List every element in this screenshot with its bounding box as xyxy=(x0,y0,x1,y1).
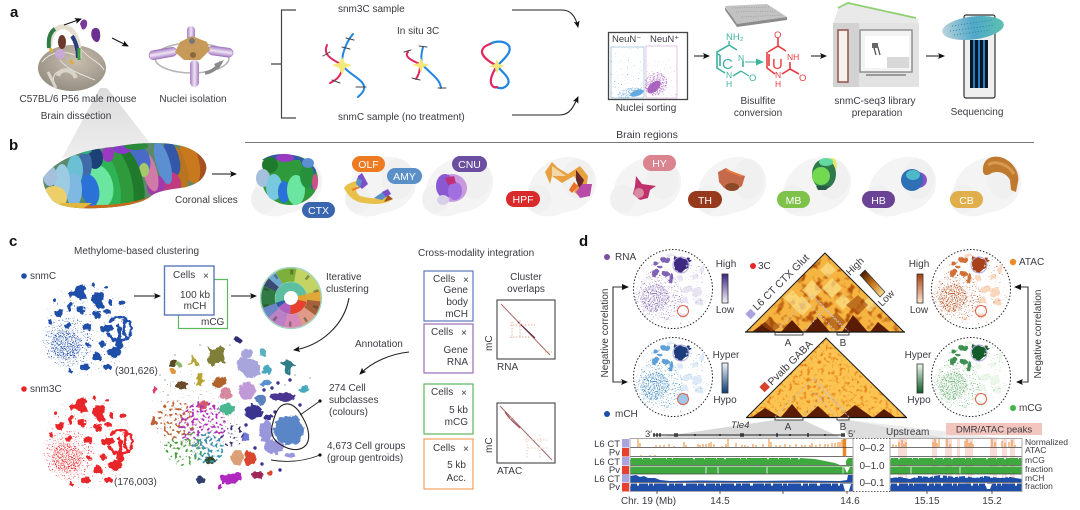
track labels: right side: fraction xyxy=(1025,481,1053,491)
map: mCH xyxy=(634,338,712,416)
chart: iterative clustering donut xyxy=(260,268,322,328)
tracks: right mCH xyxy=(890,475,1022,491)
map: RNA xyxy=(634,250,712,328)
track labels: cell types: Pv xyxy=(609,482,620,493)
arrow: snm3C sample to sorting xyxy=(512,10,578,27)
region bracket: lower A xyxy=(775,418,803,433)
label: library preparation: snmC-seq3 library xyxy=(834,96,916,107)
callout: 274 cell subclasses: subclasses xyxy=(329,395,378,406)
icon: cytosine molecule: N xyxy=(738,53,744,63)
icon: cytosine molecule: O xyxy=(749,73,756,84)
matrix boxes: 100 kb mCH and mCG: Cells xyxy=(173,270,195,281)
diagram: chromatin fragment 2 xyxy=(404,46,446,88)
matrix box: gene body mCH: Cells xyxy=(433,274,455,285)
panel label a: a xyxy=(10,4,19,21)
tracks: left mCH xyxy=(630,475,853,491)
panel a: experimental workflow xyxy=(10,3,1005,123)
icon: uracil molecule: O xyxy=(774,30,781,41)
scatter: cell subclass map xyxy=(149,337,310,490)
label: iterative clustering: clustering xyxy=(326,284,369,295)
label: DMR/ATAC peaks xyxy=(946,423,1042,436)
label: in situ 3C: In situ 3C xyxy=(397,26,439,37)
label: bisulfite conversion xyxy=(734,96,782,119)
arrow: matrix to clustering xyxy=(231,295,256,297)
label: cluster overlaps xyxy=(507,272,545,295)
label pill: CTX: CTX xyxy=(308,205,329,217)
count: snmC: (301,626) xyxy=(115,366,158,377)
track labels: right side xyxy=(1025,437,1068,491)
label: iterative clustering xyxy=(326,272,369,295)
label: nuclei sorting: Nuclei sorting xyxy=(616,103,676,114)
panel label b: b xyxy=(9,137,18,154)
label: nuclei isolation: Nuclei isolation xyxy=(159,94,227,105)
label: mouse strain: C57BL/6 P56 male mouse xyxy=(20,94,137,105)
legend: 3C xyxy=(750,261,771,272)
matrix box: 5 kb mCG: 5 kb xyxy=(449,405,468,416)
label: upstream: Upstream xyxy=(886,427,929,438)
chart: nuclei sorting gate plot xyxy=(608,32,688,101)
colour bar: RNA High to Low: High xyxy=(716,259,736,270)
icon: cytosine molecule: H xyxy=(726,79,732,89)
region: CB xyxy=(983,157,1018,192)
scale gap labels: 0–0.1 xyxy=(859,478,885,489)
label: cluster overlaps: Cluster xyxy=(510,272,543,283)
label: cluster overlaps: overlaps xyxy=(507,284,545,295)
track labels: cell types: L6 CT xyxy=(594,457,620,468)
matrix boxes: 100 kb mCH and mCG: × xyxy=(203,271,209,282)
region: CNU xyxy=(436,174,467,205)
bracket: left negative correlation xyxy=(613,287,627,382)
icon: uracil molecule xyxy=(767,30,806,89)
panel d: multi-modal epigenomic comparison xyxy=(579,233,1068,507)
matrix box: 5 kb mCG xyxy=(424,384,473,434)
matrix box: 5 kb accessibility: Cells xyxy=(433,443,455,454)
colour bar: 3C High to Low xyxy=(844,256,898,309)
matrix box: gene body mCH: × xyxy=(463,275,469,286)
label pill: TH xyxy=(688,191,722,208)
label: annotation: Annotation xyxy=(355,339,403,350)
icon: uracil molecule: H xyxy=(775,79,781,89)
matrix box: gene RNA: Cells xyxy=(431,327,453,338)
label: left negative correlation: Negative correlation xyxy=(600,289,611,377)
callout: 274 cell subclasses: 274 Cell xyxy=(329,383,366,394)
region bracket: lower B: B xyxy=(840,422,847,433)
label: sequencing: Sequencing xyxy=(951,107,1003,118)
colour bar: mCG Hyper to Hypo: Hyper xyxy=(905,350,932,361)
matrix box: 5 kb accessibility xyxy=(424,439,473,489)
matrix box: gene body mCH: mCH xyxy=(445,309,468,320)
region: OLF and AMY xyxy=(344,173,393,204)
matrix boxes: 100 kb mCH and mCG: 100 kb xyxy=(180,290,210,301)
colour bar: RNA High to Low xyxy=(716,259,736,316)
label pill: CNU: CNU xyxy=(458,159,481,171)
matrix box: gene body mCH: Gene xyxy=(444,285,468,296)
tracks: right mCG xyxy=(890,458,1022,474)
gene model: Tle4: 5′ xyxy=(848,429,855,440)
matrix boxes: 100 kb mCH and mCG: mCG xyxy=(201,317,225,328)
track labels: cell types: L6 CT xyxy=(594,474,620,485)
heatmap border: upper xyxy=(746,253,904,332)
scale gap labels xyxy=(853,438,890,492)
track labels: right side: mCH xyxy=(1025,473,1044,483)
region bracket: lower B xyxy=(837,418,849,433)
genomic axis: 14.6 xyxy=(840,496,860,507)
callout: 274 cell subclasses xyxy=(300,383,378,418)
colour bar: mCH Hyper to Hypo: Hypo xyxy=(713,395,737,406)
arrow: bisulfite to library xyxy=(811,55,826,57)
colour bar: 3C High to Low: High xyxy=(844,256,867,278)
label pill: HPF xyxy=(506,191,540,207)
ghost brain outlines xyxy=(251,157,1021,216)
chart: mC vs RNA overlap: mC xyxy=(484,335,495,351)
gene model: Tle4 xyxy=(645,429,855,440)
label pill: HY: HY xyxy=(652,158,667,170)
matrix box: 5 kb mCG: × xyxy=(461,388,467,399)
arrow: sorting to bisulfite xyxy=(694,55,709,57)
heatmap: Pvalb GABA contact map xyxy=(746,338,907,418)
chart: nuclei sorting gate plot: NeuN⁺ xyxy=(650,34,679,45)
icon: uracil molecule: NH xyxy=(787,52,799,62)
genomic axis: 15.2 xyxy=(982,496,1002,507)
region: HY xyxy=(633,176,656,200)
arrow: clustering to map xyxy=(294,298,349,350)
callout: 4,673 cell groups: 4,673 Cell groups xyxy=(327,441,405,452)
label pill: CB: CB xyxy=(959,195,974,207)
label pill: CTX xyxy=(302,202,335,218)
legend: RNA: RNA xyxy=(615,252,636,263)
label pill: OLF: OLF xyxy=(358,159,379,171)
matrix box: 5 kb accessibility: 5 kb xyxy=(447,460,466,471)
matrix box: 5 kb accessibility: × xyxy=(463,444,469,455)
heatmap border: lower xyxy=(747,338,906,417)
label: brain dissection: Brain dissection xyxy=(41,111,111,122)
heading: cross-modality integration: Cross-modality integration xyxy=(418,248,534,259)
icon: multiwell plate xyxy=(725,4,787,27)
label pill: HY xyxy=(643,155,676,171)
track labels: right side: ATAC xyxy=(1025,445,1046,455)
colour bar: ATAC High to Low xyxy=(909,259,929,316)
chart: mC vs ATAC overlap: ATAC xyxy=(497,466,522,477)
label pill: TH: TH xyxy=(698,195,712,207)
legend: mCH xyxy=(604,409,638,420)
arrow: annotation to subclasses xyxy=(360,352,409,374)
icon: cytosine molecule xyxy=(717,32,763,89)
label: bisulfite conversion: conversion xyxy=(734,108,782,119)
region bracket: upper A: A xyxy=(785,338,792,349)
label pill: MB xyxy=(777,191,810,208)
region bracket: upper A xyxy=(775,332,803,349)
genomic axis: 15.15 xyxy=(914,496,940,507)
diagram: chromatin fragment 1 xyxy=(323,34,366,97)
matrix box: 5 kb mCG: mCG xyxy=(445,417,468,428)
count: snm3C: (176,003) xyxy=(114,477,157,488)
label: snm3C sample: snm3C sample xyxy=(338,4,405,15)
arrow: snmC sample to sorting xyxy=(512,97,578,115)
colour bar: mCG Hyper to Hypo xyxy=(905,350,932,406)
legend: snmC: snmC xyxy=(30,271,56,282)
map: mCG xyxy=(932,338,1010,416)
scatter: snmC t-SNE xyxy=(41,283,133,376)
icon: centrifuge xyxy=(148,26,234,87)
track labels: right side: mCG xyxy=(1025,455,1045,465)
label: coronal slices: Coronal slices xyxy=(175,195,238,206)
track labels: cell types: L6 CT xyxy=(594,439,620,450)
region: HB xyxy=(901,169,927,191)
matrix boxes: 100 kb mCH and mCG xyxy=(164,266,228,328)
arrow: library to sequencing xyxy=(926,55,944,57)
arrow: slices to regions xyxy=(212,173,236,175)
label pill: AMY xyxy=(387,168,422,184)
projection wedges from heatmap to tracks xyxy=(652,420,1000,438)
label pill: HB: HB xyxy=(871,195,886,207)
icon: cytosine molecule: N xyxy=(726,70,732,80)
region: MB xyxy=(812,158,837,190)
chart: mC vs ATAC overlap xyxy=(484,403,555,477)
icon: uracil molecule: N xyxy=(775,70,781,80)
divider line xyxy=(245,142,1034,144)
label: iterative clustering: Iterative xyxy=(326,272,362,283)
label: DMR/ATAC peaks: DMR/ATAC peaks xyxy=(956,424,1032,436)
matrix box: 5 kb mCG: Cells xyxy=(431,387,453,398)
icon: uracil molecule: O xyxy=(799,73,806,84)
matrix box: gene RNA: Gene xyxy=(444,345,468,356)
matrix box: gene body mCH xyxy=(424,271,473,321)
track labels: cell types xyxy=(594,439,629,493)
coronal slice stack xyxy=(43,143,206,208)
arrow: t-SNE to matrix xyxy=(134,295,160,297)
region: HPF xyxy=(545,162,592,198)
matrix box: gene body mCH: body xyxy=(446,297,468,308)
label pill: CNU xyxy=(452,156,487,172)
label: bisulfite conversion: Bisulfite xyxy=(740,96,776,107)
heading: brain regions: Brain regions xyxy=(616,129,678,141)
genomic axis: 14.5 xyxy=(710,496,730,507)
colour bar: mCH Hyper to Hypo xyxy=(713,350,740,406)
icon: mouse brain dissection xyxy=(38,19,106,91)
label: library preparation: preparation xyxy=(852,108,902,119)
callout: 274 cell subclasses: (colours) xyxy=(329,407,368,418)
colour bar: ATAC High to Low: High xyxy=(909,259,929,270)
tracks: left mCG xyxy=(630,458,853,474)
legend: ATAC: ATAC xyxy=(1019,257,1044,268)
legend: snm3C: snm3C xyxy=(30,384,62,395)
gene model: Tle4: 3′ xyxy=(645,429,652,440)
arrowhead: right upper xyxy=(1014,284,1021,290)
chart: mC vs RNA overlap xyxy=(484,300,555,373)
label pill: HPF: HPF xyxy=(512,194,534,206)
icon: cytosine molecule: C xyxy=(722,56,733,73)
genomic axis: Chr. 19 (Mb) xyxy=(621,496,676,507)
colour bar: RNA High to Low: Low xyxy=(716,305,735,316)
chart: nuclei sorting gate plot: NeuN⁻ xyxy=(612,34,641,45)
bracket: right negative correlation xyxy=(1017,287,1028,382)
region: TH xyxy=(718,168,745,191)
region bracket: upper B: B xyxy=(840,338,847,349)
genomic axis xyxy=(621,491,1002,507)
tracks: pink DMR strips xyxy=(898,439,1015,491)
track labels: right side: fraction xyxy=(1025,464,1053,474)
panel label d: d xyxy=(579,233,588,250)
colour bar: 3C High to Low: Low xyxy=(876,288,898,309)
track frame lines xyxy=(630,448,1022,482)
label pill: MB: MB xyxy=(786,195,801,207)
label: L6 CT CTX Glut: L6 CT CTX Glut xyxy=(751,252,812,313)
legend: mCG: mCG xyxy=(1019,403,1043,414)
icon: uracil molecule: U xyxy=(772,56,783,73)
diagram: chromatin loop xyxy=(482,42,510,88)
region: CTX xyxy=(256,154,318,205)
label pill: HB xyxy=(862,191,895,208)
arrowhead: left upper xyxy=(622,284,629,290)
label: snmC sample: snmC sample (no treatment) xyxy=(338,112,465,123)
tracks: left ATAC xyxy=(638,439,844,456)
label: gene Tle4: Tle4 xyxy=(731,420,749,431)
colour bar: mCG Hyper to Hypo: Hypo xyxy=(907,395,931,406)
track outer frames xyxy=(630,438,1022,492)
chart: mC vs RNA overlap: RNA xyxy=(497,362,518,373)
icon: cytosine molecule: NH₂ xyxy=(726,32,744,43)
heading: methylome-based clustering: Methylome-based clustering xyxy=(74,246,199,257)
callout: 4,673 cell groups: (group gentroids) xyxy=(327,453,403,464)
callout: 4,673 cell groups xyxy=(271,441,405,464)
panel b: brain regions xyxy=(9,129,1034,218)
scale gap labels: 0–1.0 xyxy=(859,461,885,472)
scatter: snm3C t-SNE xyxy=(42,396,134,489)
legend: mCH: mCH xyxy=(615,409,638,420)
label: right negative correlation: Negative correlation xyxy=(1033,290,1044,378)
heatmap: L6 CT CTX Glut contact map xyxy=(745,253,905,332)
matrix box: gene RNA xyxy=(424,324,473,373)
label: Pvalb GABA: Pvalb GABA xyxy=(766,338,815,388)
tracks: right ATAC xyxy=(893,439,1015,447)
track labels: cell types: Pv xyxy=(609,465,620,476)
matrix box: 5 kb accessibility: Acc. xyxy=(447,473,466,484)
map: ATAC xyxy=(932,250,1010,328)
region bracket: upper B xyxy=(837,332,849,349)
magnification wedge from brain to slices xyxy=(62,88,150,158)
left bracket xyxy=(271,10,296,118)
legend: RNA xyxy=(604,252,636,263)
matrix boxes: 100 kb mCH and mCG: mCH xyxy=(184,301,206,312)
track labels: right side: Normalized xyxy=(1025,437,1068,447)
colour bar: mCH Hyper to Hypo: Hyper xyxy=(713,350,740,361)
matrix box: gene RNA: × xyxy=(461,328,467,339)
colour bar: ATAC High to Low: Low xyxy=(910,305,929,316)
scale gap labels: 0–0.2 xyxy=(859,443,885,454)
region bracket: lower A: A xyxy=(785,422,792,433)
icon: sequencing flow cell xyxy=(941,13,1005,98)
panel label c: c xyxy=(9,233,17,250)
icon: liquid handling robot xyxy=(833,3,919,87)
legend: 3C: 3C xyxy=(758,261,771,272)
panel c: methylome clustering and integration xyxy=(9,233,555,490)
label: library preparation xyxy=(834,96,916,119)
arrow: dissection to nuclei isolation xyxy=(112,38,128,46)
track labels: cell types: Pv xyxy=(609,448,620,458)
matrix box: gene RNA: RNA xyxy=(447,357,468,368)
label pill: OLF xyxy=(352,156,385,172)
label pill: AMY: AMY xyxy=(393,171,416,183)
label pill: CB xyxy=(950,191,983,208)
outline: selected subclass xyxy=(272,404,309,450)
chart: mC vs ATAC overlap: mC xyxy=(484,437,495,453)
